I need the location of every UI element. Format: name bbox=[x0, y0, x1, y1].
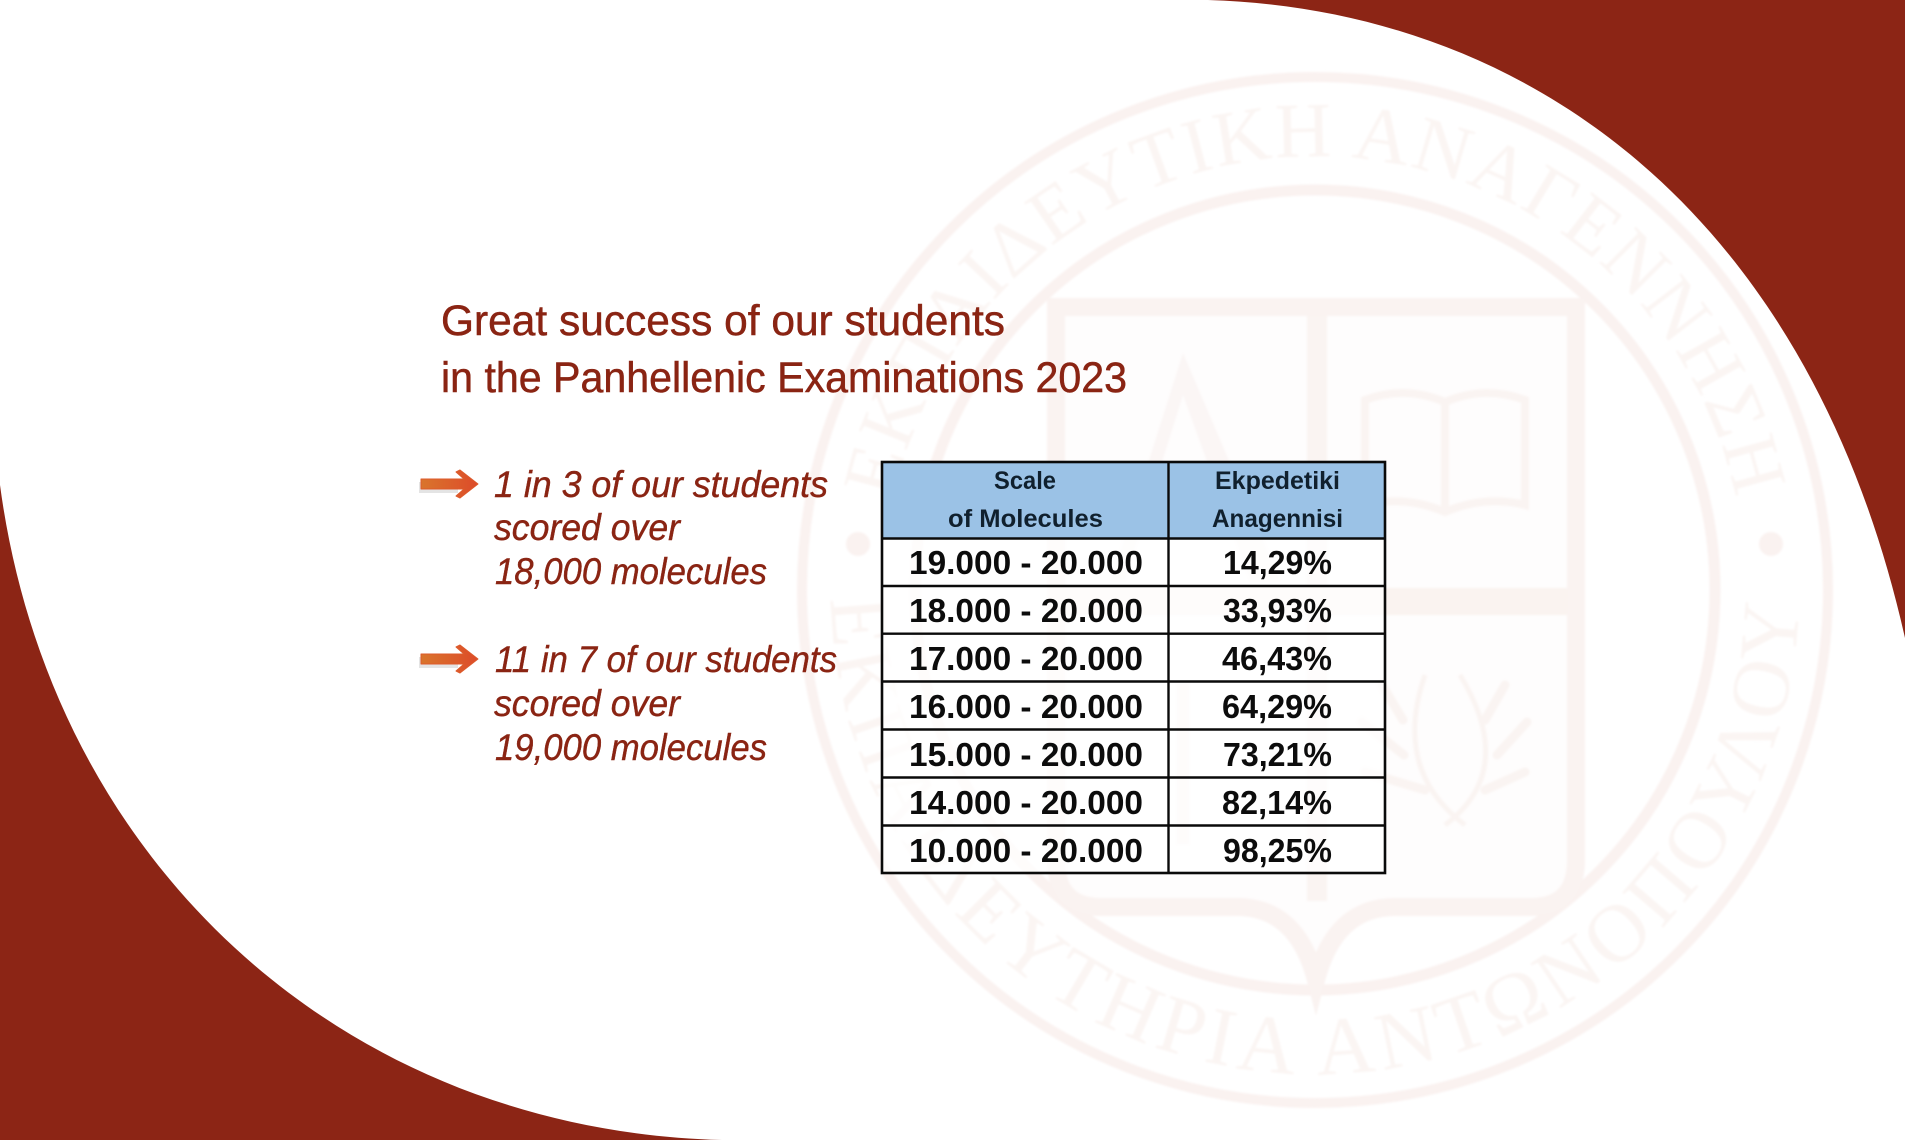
table rows: 98,25% bbox=[1223, 832, 1332, 869]
curved corner: bottom left bbox=[0, 485, 722, 1140]
table header: Ekpedetiki bbox=[1215, 467, 1340, 495]
title: in the Panhellenic Examinations 2023 bbox=[441, 354, 1127, 402]
callout: 1 in 3: 1 in 3 of our students bbox=[494, 464, 828, 505]
table rows: 17.000 - 20.000 bbox=[909, 640, 1143, 677]
table rows: 16.000 - 20.000 bbox=[909, 688, 1143, 725]
callout: 11 in 7: scored over bbox=[494, 683, 682, 724]
table header: Anagennisi bbox=[1212, 505, 1343, 533]
callout: 1 in 3 bbox=[494, 464, 828, 592]
table rows: 15.000 - 20.000 bbox=[909, 736, 1143, 773]
results table bbox=[882, 462, 1385, 873]
table rows: 46,43% bbox=[1222, 640, 1332, 677]
table header: Scale bbox=[994, 467, 1056, 495]
table rows: 33,93% bbox=[1223, 592, 1332, 629]
callout: 11 in 7 bbox=[494, 639, 837, 768]
table header: of Molecules bbox=[948, 505, 1103, 533]
callout: 11 in 7: 11 in 7 of our students bbox=[495, 639, 837, 680]
watermark: school seal: ΕΚΠΑΙΔΕΥΤΗΡΙΑ ΑΝΤΩΝΟΠΟΥΛΟΥ bbox=[831, 602, 1797, 1074]
watermark: school seal: ΕΚΠΑΙΔΕΥΤΙΚΗ ΑΝΑΓΕΝΝΗΣΗ bbox=[846, 106, 1784, 494]
table rows bbox=[909, 544, 1332, 869]
table rows: 10.000 - 20.000 bbox=[909, 832, 1143, 869]
table rows: 18.000 - 20.000 bbox=[909, 592, 1143, 629]
table rows: 64,29% bbox=[1222, 688, 1332, 725]
table rows: 73,21% bbox=[1223, 736, 1332, 773]
curved corner: top right bbox=[1208, 0, 1905, 638]
callout: 1 in 3: 18,000 molecules bbox=[495, 551, 767, 592]
callout: 1 in 3: scored over bbox=[494, 507, 682, 548]
table rows: 14.000 - 20.000 bbox=[909, 784, 1143, 821]
table rows: 14,29% bbox=[1223, 544, 1332, 581]
watermark: school seal bbox=[797, 72, 1833, 1108]
callout: 11 in 7: 19,000 molecules bbox=[495, 727, 767, 768]
icon: arrow 1 bbox=[419, 470, 478, 498]
table rows: 82,14% bbox=[1222, 784, 1332, 821]
title bbox=[441, 297, 1127, 402]
table rows: 19.000 - 20.000 bbox=[909, 544, 1143, 581]
icon: arrow 2 bbox=[419, 645, 478, 673]
table header bbox=[948, 467, 1343, 533]
title: Great success of our students bbox=[441, 297, 1005, 345]
